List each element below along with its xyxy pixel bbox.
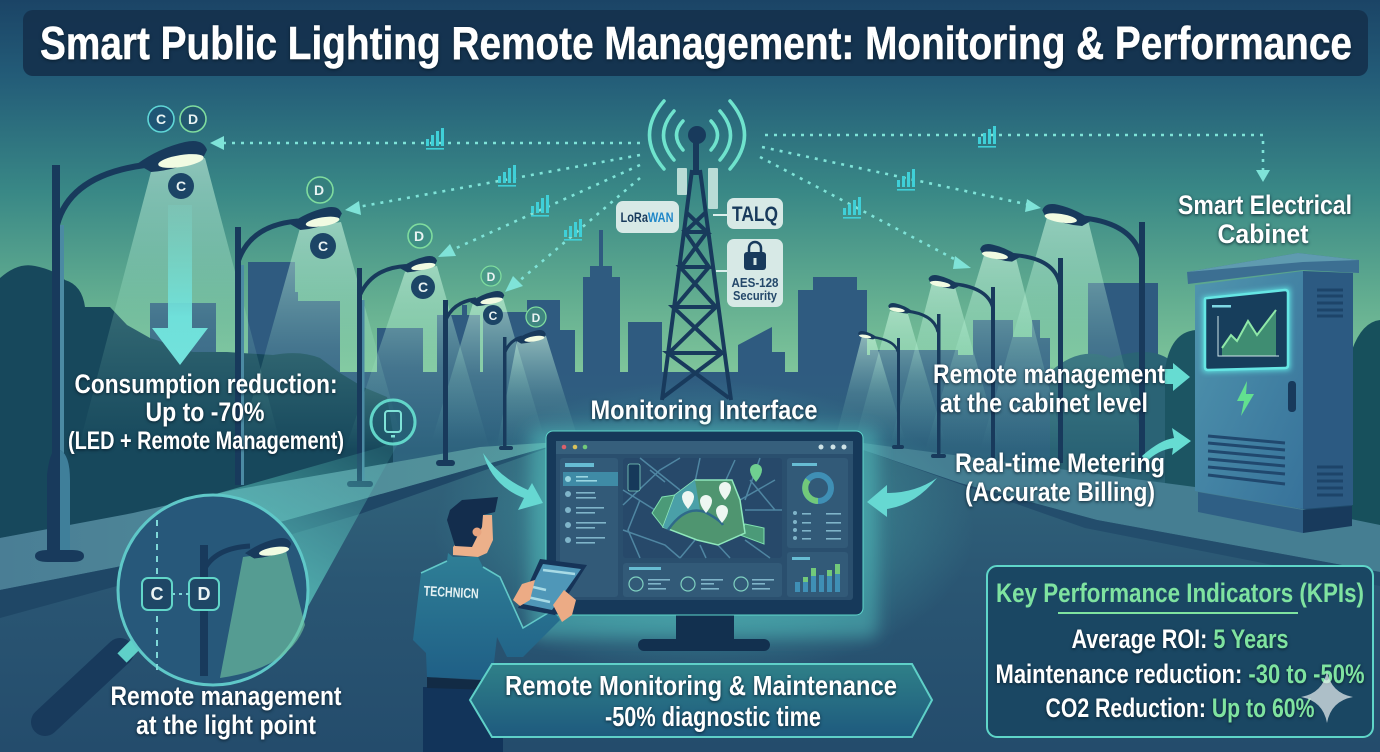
bar chart panel xyxy=(787,552,848,597)
badge: TALQ: TALQ xyxy=(732,203,778,226)
node badges on lamps: C xyxy=(489,309,498,323)
badge: LoRaWAN xyxy=(616,201,679,233)
arrow to monitor from right xyxy=(867,478,937,517)
node badges on lamps: D xyxy=(487,270,496,284)
street lamp 5 xyxy=(499,330,546,450)
street lamp right 4 xyxy=(888,303,946,458)
sidebar xyxy=(560,458,618,597)
node badges on lamps: C xyxy=(156,111,166,127)
text: smart electrical cabinet: Smart Electrical xyxy=(1178,190,1352,220)
text: cabinet level: Remote management xyxy=(933,359,1165,389)
badge: AES-128 security: AES-128 xyxy=(732,275,778,290)
street lamp right 2 xyxy=(980,244,1063,463)
center glow xyxy=(434,380,974,680)
text: smart electrical cabinet xyxy=(1178,190,1352,249)
text: consumption reduction xyxy=(68,369,344,455)
street lamp 1 xyxy=(35,141,207,562)
badge: AES-128 security xyxy=(727,239,783,307)
window bar xyxy=(556,441,853,454)
badge: LoRaWAN: LoRaWAN xyxy=(620,210,674,225)
street lamp 4 xyxy=(436,291,504,466)
C node box xyxy=(142,578,172,610)
arrow: cabinet level xyxy=(1165,363,1190,391)
banner: remote monitoring xyxy=(470,664,932,737)
trees right xyxy=(1050,320,1380,560)
text: light point: Remote management xyxy=(110,681,342,711)
text: light point xyxy=(110,681,342,740)
lower city mass xyxy=(0,372,1195,520)
text: consumption reduction: Consumption reduction: xyxy=(74,369,338,399)
icon: phone xyxy=(371,400,415,444)
text: consumption reduction: (LED + Remote Management) xyxy=(68,427,344,455)
monitor xyxy=(546,431,863,651)
data links: dotted lines xyxy=(224,135,1263,282)
street lamp right 5 xyxy=(858,331,904,449)
D node box xyxy=(189,578,219,610)
node badges on lamps xyxy=(148,106,546,327)
technician: TECHNICN xyxy=(423,583,479,601)
signal icons xyxy=(426,126,996,241)
trees left xyxy=(0,265,393,545)
bottom stats panel xyxy=(623,563,782,597)
right sidewalk xyxy=(863,443,1380,572)
node badges on lamps: D xyxy=(414,228,424,244)
D node box: D xyxy=(198,584,210,604)
street lamp 3 xyxy=(347,256,437,487)
left sidewalk xyxy=(0,443,562,590)
icon: sparkle xyxy=(1301,671,1353,723)
donut panel xyxy=(787,458,848,548)
magnifier xyxy=(45,495,308,722)
monitor glow xyxy=(530,428,878,638)
cabinet screen xyxy=(1205,290,1288,370)
text: cabinet level: at the cabinet level xyxy=(940,388,1148,418)
node badges on lamps: D xyxy=(188,111,198,127)
text: monitoring interface: Monitoring Interface xyxy=(590,395,818,425)
banner: remote monitoring: -50% diagnostic time xyxy=(605,701,821,732)
magnifier beam xyxy=(212,440,400,612)
arrow: metering xyxy=(1142,428,1191,462)
text: metering xyxy=(955,448,1165,507)
text: light point: at the light point xyxy=(136,710,316,740)
panel: KPIs: CO2 Reduction: Up to 60% xyxy=(1046,693,1314,723)
street lamp right 1 xyxy=(1042,204,1145,470)
C node box: C xyxy=(150,584,164,604)
arrowheads on data links xyxy=(210,136,1270,292)
text: consumption reduction: Up to -70% xyxy=(146,397,264,427)
street lamp 2 xyxy=(235,207,342,485)
skyline: right buildings xyxy=(738,277,1158,380)
technician xyxy=(413,497,587,752)
banner: remote monitoring: Remote Monitoring & Maintenance xyxy=(505,670,897,701)
panel: KPIs: Maintenance reduction: -30 to -50% xyxy=(996,659,1364,689)
text: metering: Real-time Metering xyxy=(955,448,1165,478)
text: metering: (Accurate Billing) xyxy=(965,477,1155,507)
text: cabinet level xyxy=(933,359,1165,418)
panel: KPIs: Average ROI: 5 Years xyxy=(1072,624,1288,654)
road xyxy=(0,443,1380,752)
background: dusk sky xyxy=(0,0,1380,480)
node badges on lamps: D xyxy=(532,311,541,325)
tablet xyxy=(518,559,587,615)
node badges on lamps: D xyxy=(314,182,324,198)
node badges on lamps: C xyxy=(318,238,328,254)
map xyxy=(623,458,782,558)
arrow: consumption reduction xyxy=(152,205,208,365)
node badges on lamps: C xyxy=(176,178,186,194)
badge: AES-128 security: Security xyxy=(733,288,778,303)
node badges on lamps: C xyxy=(418,279,428,295)
panel: KPIs xyxy=(987,566,1373,737)
communication tower xyxy=(650,101,744,400)
light cones xyxy=(78,158,1145,450)
arrow to monitor from left xyxy=(483,453,543,510)
cabinet xyxy=(1187,253,1359,533)
text: smart electrical cabinet: Cabinet xyxy=(1218,219,1309,249)
street lamp right 3 xyxy=(928,275,995,458)
badge: TALQ xyxy=(727,198,783,229)
skyline: left buildings xyxy=(150,230,662,373)
